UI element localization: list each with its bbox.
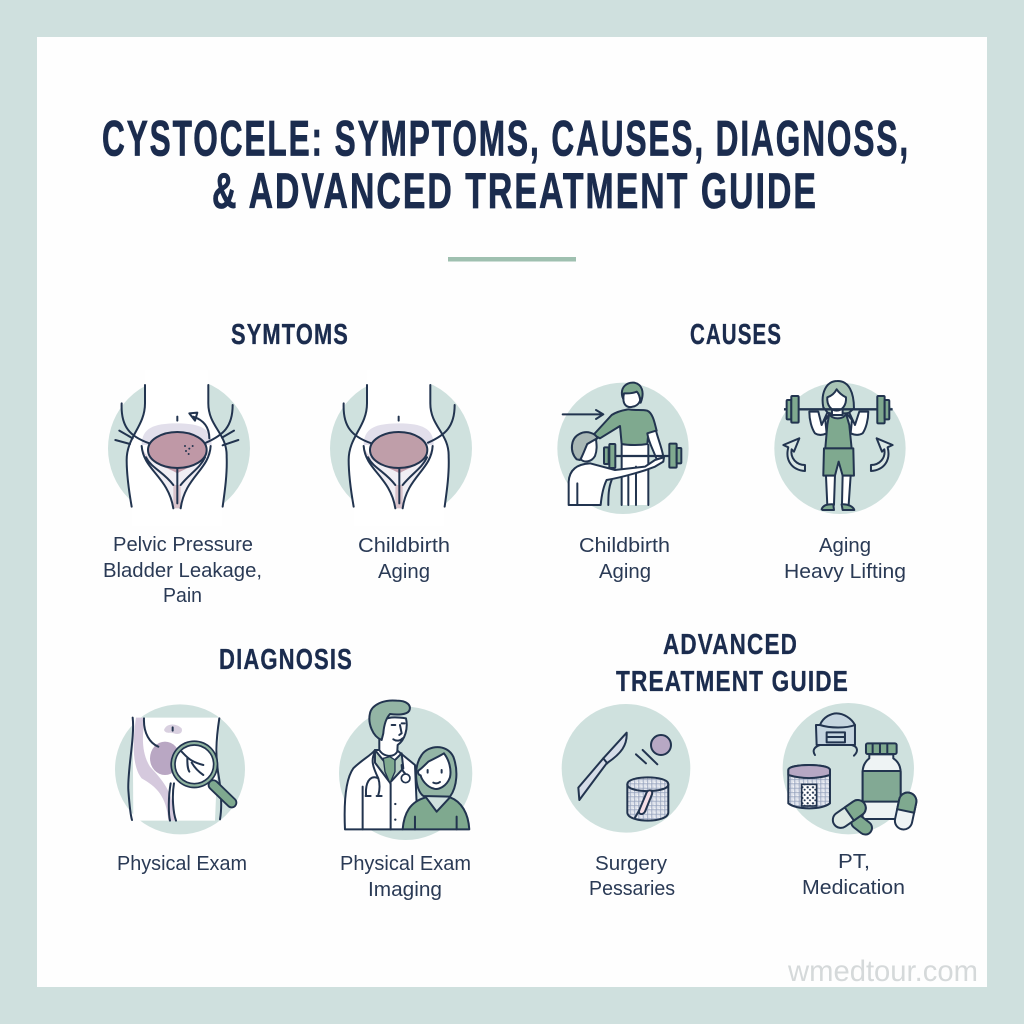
panel: symptoms (103, 319, 472, 607)
icon: woman lifting barbell with child (557, 383, 689, 514)
heading: causes: CAUSES (690, 319, 782, 351)
watermark: wmedtour.com (787, 955, 978, 988)
label: surgery, pessaries (589, 853, 675, 900)
label: pt, medication: PT, (838, 851, 870, 873)
label: surgery, pessaries: Surgery (595, 853, 667, 875)
title (102, 110, 910, 219)
label: surgery, pessaries: Pessaries (589, 878, 675, 900)
icon: medication and physical therapy (783, 703, 918, 837)
label: pt, medication (802, 851, 905, 899)
icon: woman lifting heavy barbell (774, 381, 906, 514)
panel: diagnosis (115, 644, 472, 901)
heading: advanced treatment guide: TREATMENT GUIDE (616, 666, 849, 698)
label: aging, heavy lifting: Heavy Lifting (784, 561, 906, 583)
panel: advanced treatment guide (562, 629, 918, 900)
label: physical exam: Physical Exam (117, 853, 247, 875)
label: childbirth, aging (358, 535, 450, 583)
icon: scalpel, pessary, mesh (562, 704, 690, 833)
label: childbirth, aging: Childbirth (358, 535, 450, 557)
panel: causes (557, 319, 906, 583)
label: childbirth, aging: Childbirth (579, 535, 670, 557)
icon: bladder (330, 370, 472, 527)
label: pelvic pressure, bladder leakage, pain (103, 534, 262, 607)
label: physical exam, imaging: Imaging (368, 879, 442, 901)
heading: advanced treatment guide (616, 629, 849, 698)
label: physical exam, imaging: Physical Exam (340, 853, 471, 875)
label: aging, heavy lifting: Aging (819, 535, 871, 557)
label: aging, heavy lifting (784, 535, 906, 583)
label: pelvic pressure, bladder leakage, pain: Bladder Leakage, (103, 560, 262, 582)
icon: bladder with pressure arrow (108, 370, 250, 527)
label: childbirth, aging: Aging (378, 561, 430, 583)
label: pelvic pressure, bladder leakage, pain: Pelvic Pressure (113, 534, 253, 556)
heading: diagnosis: DIAGNOSIS (219, 644, 353, 676)
icon: doctor and patient (339, 700, 472, 840)
heading: advanced treatment guide: ADVANCED (663, 629, 798, 661)
label: pelvic pressure, bladder leakage, pain: Pain (163, 585, 202, 607)
label: childbirth, aging: Aging (599, 561, 651, 583)
label: physical exam, imaging (340, 853, 471, 901)
label: childbirth, aging (579, 535, 670, 583)
heading: symptoms: SYMTOMS (231, 319, 349, 351)
icon: pelvic cross-section with magnifier (115, 704, 245, 834)
label: pt, medication: Medication (802, 877, 905, 899)
